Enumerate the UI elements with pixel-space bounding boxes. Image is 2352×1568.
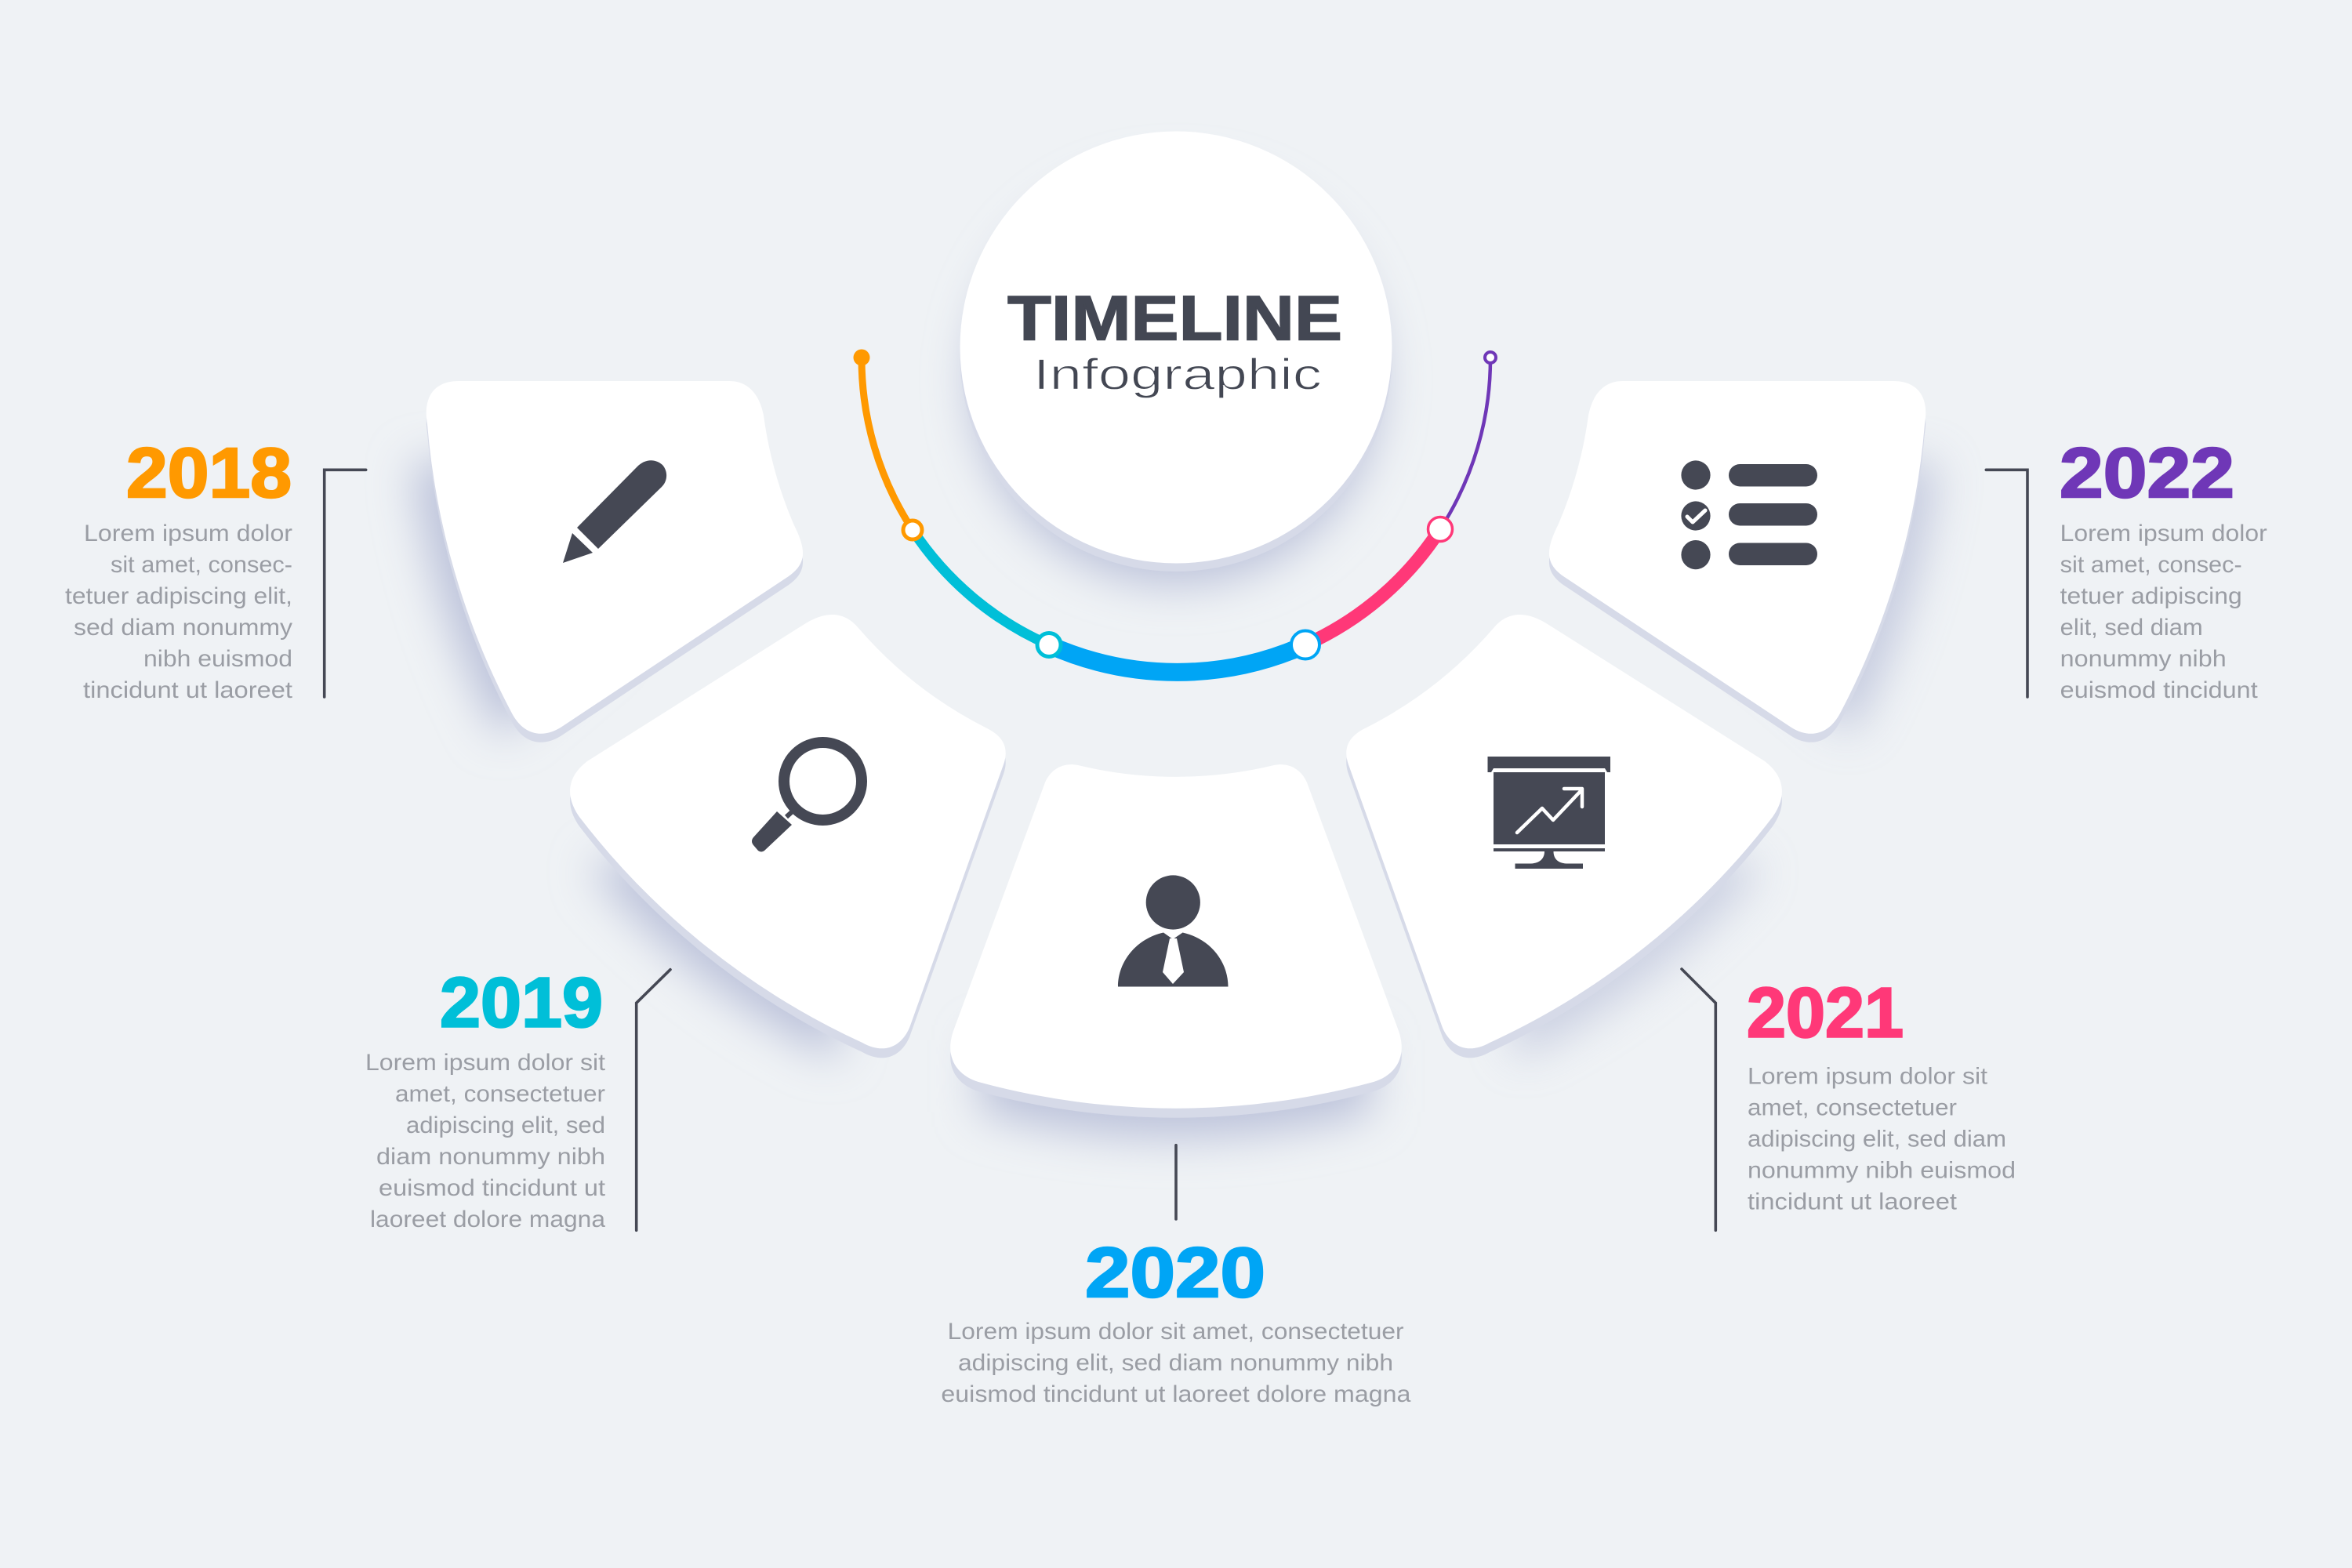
description: 2021: adipiscing elit, sed diam — [1748, 1127, 2006, 1152]
panel: 2022 card — [1549, 381, 1940, 742]
description: 2019: Lorem ipsum dolor sit — [365, 1050, 606, 1076]
year: 2019: 2019 — [440, 964, 603, 1042]
description: 2021: nonummy nibh euismod — [1748, 1158, 2016, 1184]
description: 2018: sed diam nonummy — [74, 615, 292, 641]
description: 2022 — [2060, 521, 2267, 703]
arc segment: 2022 purple — [1440, 358, 1490, 529]
arc segment: 2020 blue — [1049, 644, 1305, 672]
year: 2020: 2020 — [1085, 1234, 1265, 1312]
icon: businessman — [1118, 875, 1228, 986]
year: 2022: 2022 — [2060, 434, 2234, 513]
node: blue — [1291, 630, 1319, 659]
panel: 2018 card — [412, 381, 803, 742]
leader line: 2022 — [1986, 470, 2027, 697]
icon: pencil — [563, 460, 666, 563]
central title circle — [960, 132, 1392, 585]
arc segment: 2019 cyan — [913, 530, 1049, 644]
title: TIMELINE — [1007, 284, 1342, 354]
description: 2022: nonummy nibh — [2060, 646, 2227, 672]
arc segment: 2018 orange — [862, 358, 913, 530]
text block: 2022 — [2060, 434, 2267, 703]
description: 2020: euismod tincidunt ut laoreet dolore magna — [941, 1381, 1411, 1407]
description: 2020: adipiscing elit, sed diam nonummy nibh — [958, 1350, 1393, 1376]
description: 2022: euismod tincidunt — [2060, 677, 2258, 703]
panel: 2021 card — [1346, 615, 1782, 1060]
end dot: purple — [1485, 352, 1496, 363]
description: 2022: Lorem ipsum dolor — [2060, 521, 2267, 546]
description: 2022: sit amet, consec- — [2060, 552, 2242, 578]
arc segment: 2021 pink — [1305, 529, 1440, 644]
description: 2018: tetuer adipiscing elit, — [65, 583, 292, 609]
icon: magnifying glass — [752, 742, 862, 851]
leader line: 2020 — [1174, 1145, 1178, 1219]
year: 2018: 2018 — [126, 434, 292, 513]
description: 2019 — [365, 1050, 606, 1232]
leader line: 2019 — [637, 970, 670, 1230]
leader line: 2018 — [325, 470, 366, 697]
timeline arc — [853, 350, 1496, 672]
description: 2019: amet, consectetuer — [395, 1081, 605, 1107]
description: 2019: adipiscing elit, sed — [406, 1112, 605, 1138]
start dot: orange — [853, 350, 870, 365]
icon: presentation screen with rising chart — [1488, 757, 1610, 869]
text block: 2018 — [65, 434, 293, 703]
description: 2020 — [941, 1319, 1411, 1407]
leader line: 2021 — [1682, 969, 1715, 1230]
year: 2021: 2021 — [1747, 975, 1904, 1053]
description: 2018: tincidunt ut laoreet — [83, 677, 293, 703]
text block: 2020 — [941, 1234, 1411, 1407]
description: 2021: tincidunt ut laoreet — [1748, 1189, 1958, 1215]
description: 2020: Lorem ipsum dolor sit amet, consectetuer — [948, 1319, 1404, 1345]
description: 2018 — [65, 521, 293, 703]
node: orange — [903, 521, 922, 539]
description: 2019: laoreet dolore magna — [370, 1207, 605, 1232]
description: 2021: amet, consectetuer — [1748, 1095, 1957, 1121]
text block: 2019 — [365, 964, 606, 1232]
description: 2018: sit amet, consec- — [111, 552, 292, 578]
description: 2021 — [1748, 1064, 2016, 1215]
description: 2019: diam nonummy nibh — [376, 1144, 605, 1170]
description: 2021: Lorem ipsum dolor sit — [1748, 1064, 1988, 1090]
description: 2018: nibh euismod — [143, 646, 292, 672]
node: pink — [1428, 517, 1452, 541]
panel: 2020 card — [950, 764, 1402, 1138]
description: 2018: Lorem ipsum dolor — [84, 521, 292, 546]
text block: 2021 — [1747, 975, 2016, 1215]
description: 2019: euismod tincidunt ut — [379, 1175, 606, 1201]
description: 2022: tetuer adipiscing — [2060, 583, 2242, 609]
description: 2022: elit, sed diam — [2060, 615, 2203, 641]
subtitle: Infographic — [1033, 350, 1322, 399]
panel: 2019 card — [570, 615, 1006, 1060]
icon: checklist — [1681, 460, 1817, 569]
node: cyan — [1037, 633, 1061, 657]
